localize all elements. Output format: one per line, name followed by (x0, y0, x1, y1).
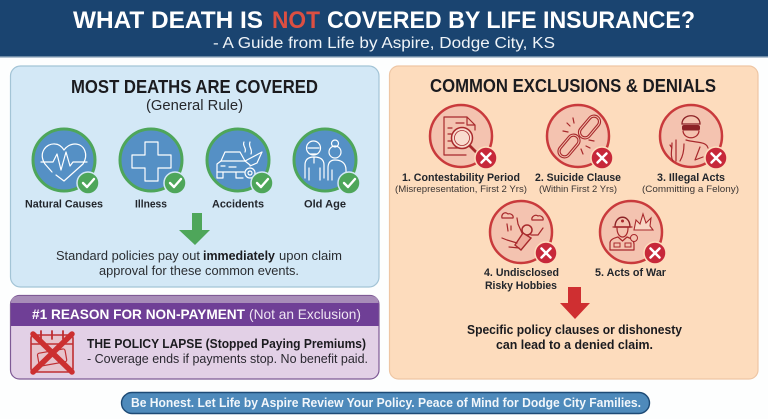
label: undisclosed risky hobbies (484, 267, 559, 292)
header banner (0, 0, 768, 58)
text: specific policy clauses (467, 322, 683, 352)
icon: suicide clause broken chain (547, 105, 613, 169)
text: standard policies pay out: Standard policies pay out (56, 248, 200, 263)
text: the policy lapse: - Coverage ends if payments stop. No benefit paid. (87, 352, 368, 366)
label: illness: Illness (135, 198, 167, 210)
label: suicide clause: (Within First 2 Yrs) (539, 184, 617, 195)
arrow: red down (560, 287, 590, 319)
icon: crossed out calendar (31, 331, 73, 372)
icon: accidents crashed car (207, 129, 273, 194)
arrow: green down (179, 213, 210, 245)
footer call to action pill (122, 392, 650, 414)
label: acts of war: 5. Acts of War (595, 267, 667, 279)
icon: contestability magnifier on document (430, 105, 497, 169)
icon: illegal acts masked figure (660, 105, 727, 169)
panel: common exclusions and denials (390, 66, 758, 379)
heading: common exclusions and denials: COMMON EXCLUSIONS & DENIALS (430, 76, 716, 96)
panel: number one reason for non-payment (10, 296, 379, 379)
title: COVERED BY LIFE INSURANCE? (327, 7, 695, 34)
text: the policy lapse: THE POLICY LAPSE (Stopped Paying Premiums) (87, 337, 366, 351)
purple heading bar: #1 REASON FOR NON-PAYMENT (32, 306, 245, 322)
title: WHAT DEATH IS (73, 7, 263, 34)
label: contestability period (395, 172, 527, 195)
title (73, 7, 695, 34)
label: suicide clause: 2. Suicide Clause (535, 172, 621, 184)
heading: most deaths are covered: MOST DEATHS ARE COVERED (71, 77, 318, 97)
label: accidents: Accidents (212, 198, 264, 210)
text: standard policies pay out: approval for these common events. (99, 263, 299, 278)
text: standard policies pay out: immediately (203, 248, 276, 263)
purple heading bar (11, 296, 378, 326)
icon: acts of war soldier (600, 201, 666, 264)
label: contestability period: 1. Contestability Period (402, 172, 520, 184)
label: suicide clause (535, 172, 621, 195)
icon: illness medical cross (120, 129, 186, 194)
label: undisclosed risky hobbies: Risky Hobbies (485, 280, 557, 292)
footer call to action pill: Be Honest. Let Life by Aspire Review Your Policy. Peace of Mind for Dodge City Families. (131, 396, 641, 410)
subheading: general rule: (General Rule) (146, 98, 243, 114)
text: specific policy clauses: Specific policy clauses or dishonesty (467, 322, 683, 337)
icon: old age couple (294, 129, 360, 194)
title: NOT (272, 7, 320, 34)
label: natural causes: Natural Causes (25, 198, 103, 210)
text: standard policies pay out (56, 248, 342, 278)
text: the policy lapse (87, 337, 368, 366)
label: undisclosed risky hobbies: 4. Undisclosed (484, 267, 559, 279)
purple heading bar: (Not an Exclusion) (249, 306, 361, 322)
label: illegal acts: 3. Illegal Acts (657, 172, 725, 184)
icon: natural causes heart (33, 129, 99, 194)
label: illegal acts: (Committing a Felony) (642, 184, 739, 195)
panel: most deaths are covered (10, 66, 379, 287)
subtitle: - A Guide from Life by Aspire, Dodge City, KS (213, 35, 555, 52)
text: standard policies pay out: upon claim (279, 248, 342, 263)
label: illegal acts (642, 172, 739, 195)
label: contestability period: (Misrepresentation, First 2 Yrs) (395, 184, 527, 195)
text: specific policy clauses: can lead to a denied claim. (496, 337, 653, 352)
icon: risky hobbies skydiver (490, 201, 557, 264)
label: old age: Old Age (304, 198, 346, 210)
